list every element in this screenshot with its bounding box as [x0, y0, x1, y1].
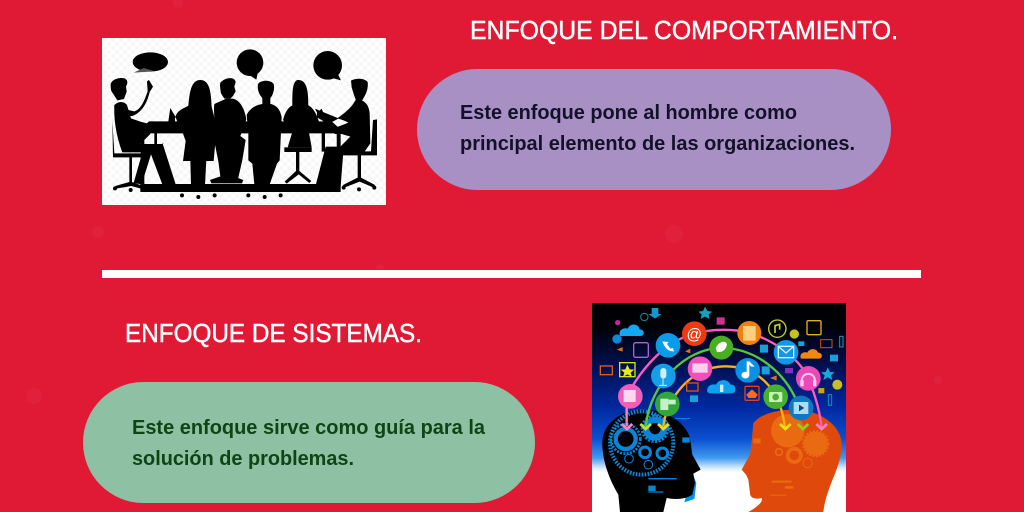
- heading: enfoque de sistemas: ENFOQUE DE SISTEMAS.: [125, 320, 422, 348]
- callout: systems approach: [83, 382, 535, 503]
- white divider: [102, 270, 921, 278]
- image: two heads with connected icons: [592, 303, 846, 512]
- arcs: [627, 330, 822, 428]
- callout: behaviour approach: principal elemento de las organizaciones.: [460, 132, 855, 155]
- man 2: [210, 78, 246, 183]
- callout: systems approach: Este enfoque sirve como guía para la: [132, 417, 486, 439]
- woman 1: [175, 80, 216, 185]
- speech bubbles: [133, 49, 342, 80]
- orange head: [742, 410, 842, 512]
- circular app icons: [618, 321, 822, 420]
- woman 2: [283, 80, 320, 184]
- infographic canvas: [83, 20, 921, 512]
- heading: enfoque del comportamiento: ENFOQUE DEL COMPORTAMIENTO.: [470, 17, 898, 45]
- small icons: [600, 307, 843, 405]
- circular app icons: @: [687, 327, 702, 344]
- black head: [602, 410, 701, 512]
- man 3: [247, 81, 282, 184]
- person right: [315, 79, 377, 188]
- callout: behaviour approach: Este enfoque pone al hombre como: [460, 101, 797, 124]
- callout: systems approach: solución de problemas.: [132, 448, 354, 470]
- image: meeting silhouettes: [102, 38, 386, 205]
- callout: behaviour approach: [417, 69, 891, 190]
- arrowheads: [622, 424, 827, 429]
- table: [113, 108, 376, 199]
- person left: [111, 78, 176, 190]
